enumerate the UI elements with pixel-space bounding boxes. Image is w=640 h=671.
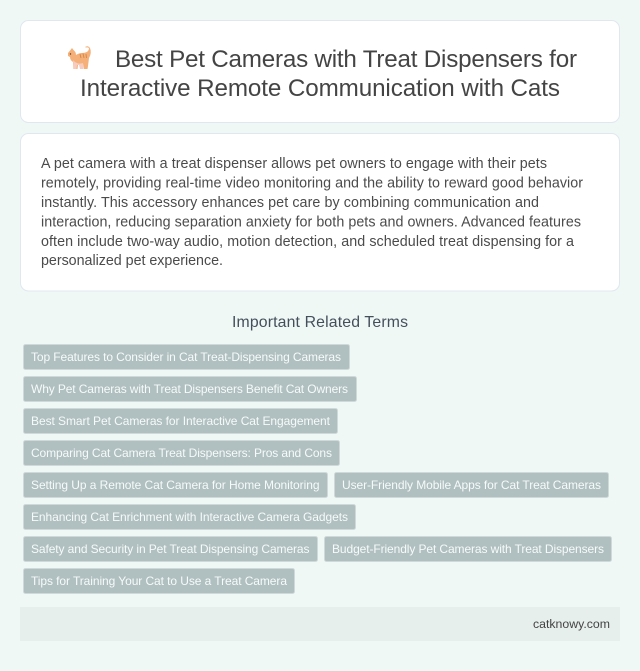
tag: budget: Budget-Friendly Pet Cameras with Treat Dispensers [332,542,604,556]
tag: best smart cameras: Best Smart Pet Cameras for Interactive Cat Engagement [31,414,331,428]
tag: enrichment [24,504,356,530]
tag: setting up: Setting Up a Remote Cat Camera for Home Monitoring [31,478,320,492]
text block: description: remotely, providing real-time video monitoring and the ability to reward good behavior [41,175,583,191]
tag: comparing dispensers: Comparing Cat Camera Treat Dispensers: Pros and Cons [31,446,332,460]
tag: comparing dispensers [24,440,340,466]
tag: mobile apps: User-Friendly Mobile Apps for Cat Treat Cameras [342,478,601,492]
tag: mobile apps [334,472,608,498]
icon: cat [68,46,91,69]
heading: important related terms: Important Related Terms [232,314,408,331]
tag: top features: Top Features to Consider in Cat Treat-Dispensing Cameras [31,350,341,364]
tag: safety: Safety and Security in Pet Treat Dispensing Cameras [31,542,310,556]
title: Interactive Remote Communication with Cats [80,75,560,102]
tag: why pet cameras: Why Pet Cameras with Treat Dispensers Benefit Cat Owners [31,382,348,396]
text block: description [41,156,583,269]
panel: title card [20,20,620,122]
tag: training tips [24,568,294,594]
panel: description card [20,134,620,291]
title: Best Pet Cameras with Treat Dispensers for [115,46,577,73]
tag: training tips: Tips for Training Your Cat to Use a Treat Camera [31,574,287,588]
panel: related term tags [24,344,612,594]
footer: catknowy.com [533,617,610,631]
tag: top features [24,344,350,370]
text block: description: A pet camera with a treat dispenser allows pet owners to engage with their pets [41,156,547,172]
tag: setting up [24,472,328,498]
footer [20,607,620,641]
tag: safety [24,536,318,562]
text block: description: personalized pet experience. [41,253,223,269]
title [80,46,577,102]
tag: best smart cameras [24,408,338,434]
text block: description: instantly. This accessory enhances pet care by combining communication and [41,195,539,211]
tag: budget [324,536,612,562]
text block: description: interaction, reducing separation anxiety for both pets and owners. Advanced features [41,214,581,230]
tag: enrichment: Enhancing Cat Enrichment with Interactive Camera Gadgets [31,510,348,524]
text block: description: often include two-way audio, motion detection, and scheduled treat dispensing for a [41,234,574,250]
tag: why pet cameras [24,376,356,402]
